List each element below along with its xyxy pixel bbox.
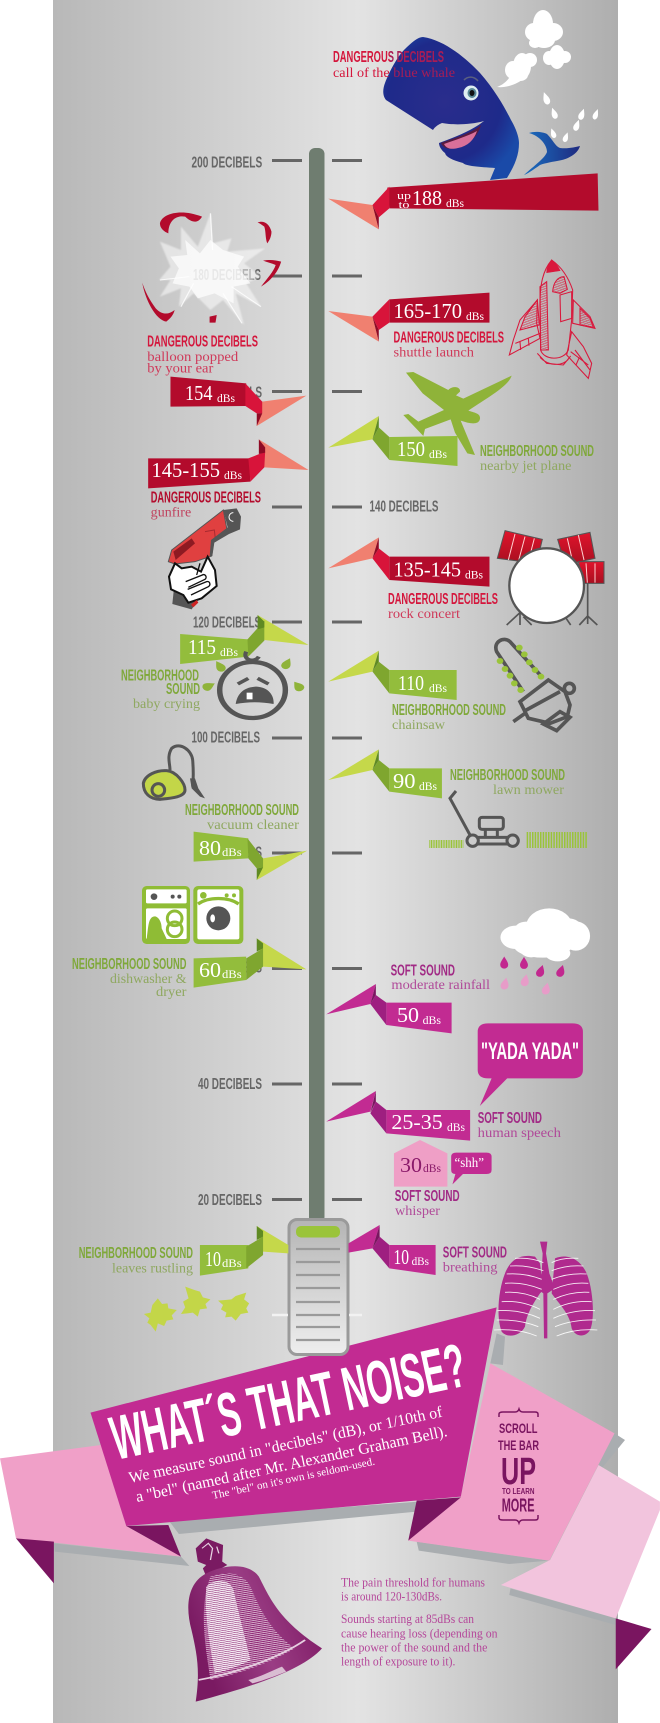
tag: 25-35 dBs human speech: SOFT SOUND: [478, 1110, 542, 1127]
icon: rocket: [509, 260, 595, 378]
tag: 90 dBs lawn mower: 90: [393, 769, 416, 793]
lightest ribbon shadow: [509, 1588, 616, 1625]
toms: [497, 531, 542, 563]
tag: 165-170 dBs shuttle: DANGEROUS DECIBELS: [394, 330, 504, 347]
tag: 154 dBs: [170, 377, 306, 426]
tag: 110 dBs chainsaw: dBs: [429, 683, 448, 695]
tag: 50 dBs moderate rainfall: moderate rainfall: [391, 977, 490, 992]
banner text: We measure sound in "decibels" (dB), or 1/10th of: [127, 1404, 444, 1487]
left ribbon tail: [16, 1538, 54, 1583]
tag: 10 dBs leaves rustling: dBs: [222, 1258, 242, 1270]
tag: 145-155 dBs gunfire: [148, 439, 309, 520]
decibel scale ticks and labels: 40 DECIBELS: [198, 1076, 262, 1093]
icon: lungs: [494, 1242, 597, 1338]
tag: 154 dBs: dBs: [217, 393, 236, 405]
tag: 110 dBs chainsaw: [328, 651, 506, 732]
whale label: DANGEROUS DECIBELS: [333, 49, 444, 66]
speech bubble: yada yada: [478, 1023, 583, 1106]
tag: 60 dBs dishwasher and dryer: dBs: [222, 969, 242, 981]
left ribbon: [0, 1445, 181, 1557]
scroll the bar up callout: SCROLL: [499, 1420, 538, 1436]
tag: up to 188 dBs: [328, 173, 598, 229]
tag: 165-170 dBs shuttle: dBs: [466, 311, 485, 323]
banner text: a "bel" (named after Mr. Alexander Graham Bell).: [134, 1423, 449, 1506]
tag: 145-155 dBs gunfire: DANGEROUS DECIBELS: [151, 490, 261, 507]
tag: 165-170 dBs shuttle: shuttle launch: [394, 345, 474, 360]
hearing facts: length of exposure to it).: [341, 1655, 455, 1669]
tag: 150 dBs jet plane: 150: [397, 437, 425, 461]
banner text: The "bel" on it's own is seldom-used.: [211, 1456, 376, 1502]
tag: 50 dBs moderate rainfall: [326, 963, 490, 1033]
tag: up to 188 dBs: 188: [412, 186, 442, 210]
tag: 10 dBs breathing: dBs: [412, 1256, 429, 1268]
tag: 135-145 dBs rock concert: 135-145: [394, 558, 461, 582]
tag: 120 area, 115 dBs baby: [121, 615, 309, 711]
tag: 30 dBs whisper: SOFT SOUND: [395, 1188, 460, 1205]
tag: 150 dBs jet plane: nearby jet plane: [480, 458, 572, 473]
slider rod: [309, 148, 324, 1223]
tag: 80 dBs: dBs: [222, 847, 242, 859]
vacuum cleaner label: [185, 802, 300, 832]
icon: bell: [188, 1538, 322, 1702]
speech bubble: shh: [451, 1153, 492, 1184]
whale spout clouds: [497, 10, 571, 87]
bell body: [188, 1566, 322, 1702]
grass: [429, 832, 463, 856]
icon: leaves: [144, 1287, 249, 1332]
tag: 90 dBs lawn mower: lawn mower: [493, 782, 565, 797]
decibel scale ticks and labels: 80 DECIBELS: [198, 845, 262, 862]
tag: 25-35 dBs human speech: [326, 1091, 561, 1141]
tag: 135-145 dBs rock concert: dBs: [465, 570, 484, 582]
tag: up to 188 dBs: dBs: [446, 198, 465, 210]
icon: chainsaw: [496, 639, 574, 731]
slider knob: [272, 1220, 362, 1354]
icon: crying baby: [201, 652, 306, 718]
scroll the bar up callout: [498, 1409, 539, 1523]
hearing facts: The pain threshold for humans: [341, 1576, 485, 1590]
icon: gun: [168, 508, 241, 609]
balloon pop: by your ear: [147, 361, 214, 376]
icon: rain cloud: [500, 908, 590, 995]
tag: 135-145 dBs rock concert: rock concert: [388, 606, 460, 621]
tag: 165-170 dBs shuttle: [328, 293, 504, 360]
icon: lawn mower: [429, 791, 588, 846]
tag: 145-155 dBs gunfire: 145-155: [152, 458, 220, 482]
main banner: [90, 1307, 497, 1526]
right tail: [616, 1618, 652, 1669]
vacuum cleaner label: vacuum cleaner: [207, 817, 300, 832]
water drops: [541, 91, 600, 143]
tag: 165-170 dBs shuttle: 165-170: [394, 299, 462, 323]
bell rim: [199, 1640, 305, 1680]
tag: 25-35 dBs human speech: 25-35: [391, 1110, 443, 1134]
bass drum: [509, 548, 584, 623]
speech bubble: yada yada: "YADA YADA": [481, 1038, 579, 1065]
tag: 50 dBs moderate rainfall: 50: [397, 1003, 419, 1027]
hearing facts: is around 120-130dBs.: [341, 1590, 442, 1604]
scroll the bar up callout: TO LEARN: [502, 1487, 535, 1496]
tag: 120 area, 115 dBs baby: 115: [188, 635, 216, 659]
icon: drum kit: [497, 531, 604, 625]
tag: 25-35 dBs human speech: dBs: [447, 1122, 466, 1134]
left fold: [126, 1525, 181, 1557]
tag: 60 dBs dishwasher and dryer: dishwasher &: [110, 971, 187, 986]
tag: 90 dBs lawn mower: NEIGHBORHOOD SOUND: [450, 767, 565, 784]
tag: 120 area, 115 dBs baby: NEIGHBORHOOD: [121, 668, 199, 685]
decibel scale ticks and labels: 120 DECIBELS: [193, 615, 261, 632]
tag: 10 dBs breathing: [348, 1225, 507, 1275]
tag: 10 dBs breathing: 10: [394, 1245, 409, 1269]
hearing facts: cause hearing loss (depending on: [341, 1627, 498, 1641]
scroll the bar up callout: MORE: [502, 1496, 534, 1516]
tag: 120 area, 115 dBs baby: baby crying: [133, 696, 200, 711]
vacuum cleaner label: NEIGHBORHOOD SOUND: [185, 802, 299, 819]
decibel scale ticks and labels: 180 DECIBELS: [193, 267, 261, 284]
tag: 110 dBs chainsaw: NEIGHBORHOOD SOUND: [392, 702, 506, 719]
icon: jet plane: [403, 372, 512, 455]
hearing facts: [341, 1576, 498, 1669]
tag: 60 dBs dishwasher and dryer: [72, 938, 306, 999]
tag: 10 dBs leaves rustling: NEIGHBORHOOD SOUND: [79, 1245, 193, 1262]
tag: 150 dBs jet plane: dBs: [429, 449, 448, 461]
tag: 10 dBs breathing: breathing: [443, 1260, 498, 1275]
tag: 154 dBs: 154: [185, 381, 213, 405]
tag: 10 dBs breathing: SOFT SOUND: [443, 1245, 507, 1262]
decibel scale ticks and labels: [192, 155, 438, 1209]
whale tail: [524, 132, 580, 175]
tag: 10 dBs leaves rustling: [79, 1226, 288, 1276]
tag: 145-155 dBs gunfire: dBs: [224, 470, 243, 482]
icon: vacuum cleaner: [143, 746, 205, 799]
decibel scale ticks and labels: 160 DECIBELS: [192, 385, 262, 402]
balloon pop: balloon popped: [147, 349, 239, 364]
tag: 90 dBs lawn mower: dBs: [419, 781, 438, 793]
speech bubble: shh: “shh”: [454, 1155, 484, 1170]
lightest ribbon: [501, 1465, 660, 1618]
balloon fragments: [142, 212, 281, 323]
tag: 150 dBs jet plane: [328, 416, 594, 473]
tag: 80 dBs: [194, 832, 307, 880]
balloon pop: DANGEROUS DECIBELS: [147, 334, 258, 351]
tag: up to 188 dBs: to: [398, 200, 410, 211]
tag: 10 dBs leaves rustling: leaves rustling: [112, 1260, 193, 1276]
left ribbon shadow: [54, 1543, 189, 1566]
decibel scale ticks and labels: 200 DECIBELS: [192, 155, 262, 172]
hearing facts: Sounds starting at 85dBs can: [341, 1612, 475, 1626]
decibel scale ticks and labels: 20 DECIBELS: [198, 1192, 262, 1209]
decibel scale ticks and labels: 140 DECIBELS: [370, 499, 438, 516]
scroll the bar up callout: THE BAR: [498, 1437, 539, 1453]
tag: 30 dBs whisper: [394, 1140, 460, 1218]
whale: [383, 10, 600, 180]
tag: 80 dBs: 80: [199, 836, 221, 860]
icon: dishwasher and dryer: [142, 886, 243, 944]
tag: 135-145 dBs rock concert: [328, 537, 498, 621]
tag: 30 dBs whisper: whisper: [395, 1203, 441, 1218]
whale eye: [464, 77, 478, 100]
tag: 120 area, 115 dBs baby: dBs: [220, 647, 239, 659]
tag: 30 dBs whisper: 30: [400, 1153, 422, 1177]
tag: 90 dBs lawn mower: [328, 749, 565, 798]
decibel scale ticks and labels: 60 DECIBELS: [198, 960, 262, 977]
right ribbon fold: [408, 1497, 461, 1541]
whale label: call of the blue whale: [333, 65, 455, 80]
ribbon banner: [0, 1307, 660, 1669]
tag: 60 dBs dishwasher and dryer: 60: [199, 958, 221, 982]
decibel scale ticks and labels: 100 DECIBELS: [192, 730, 260, 747]
tag: 135-145 dBs rock concert: DANGEROUS DECIBELS: [388, 591, 498, 608]
tag: 110 dBs chainsaw: chainsaw: [392, 717, 445, 732]
banner shadow: [168, 1498, 463, 1534]
tag: 60 dBs dishwasher and dryer: dryer: [156, 984, 187, 999]
tag: 30 dBs whisper: dBs: [423, 1163, 442, 1175]
right ribbon: [408, 1363, 614, 1561]
bell highlight: [206, 1581, 250, 1673]
whale mouth: [441, 125, 481, 149]
right ribbon shadows: [490, 1333, 505, 1365]
white splash: [159, 213, 265, 325]
tag: 25-35 dBs human speech: human speech: [478, 1125, 561, 1140]
scroll the bar up callout: UP: [501, 1451, 536, 1493]
tag: up to 188 dBs: up: [397, 191, 411, 202]
tag: 120 area, 115 dBs baby: SOUND: [166, 681, 200, 698]
hearing facts: the power of the sound and the: [341, 1641, 488, 1655]
tag: 10 dBs leaves rustling: 10: [205, 1247, 221, 1271]
bell crown: [196, 1538, 227, 1577]
tag: 50 dBs moderate rainfall: SOFT SOUND: [391, 963, 455, 980]
bell shading: [204, 1573, 295, 1680]
tag: 60 dBs dishwasher and dryer: NEIGHBORHOOD SOUND: [72, 956, 186, 973]
tag: 145-155 dBs gunfire: gunfire: [151, 505, 191, 520]
tag: 110 dBs chainsaw: 110: [398, 671, 424, 695]
balloon pop: [142, 212, 281, 376]
tag: 50 dBs moderate rainfall: dBs: [423, 1015, 442, 1027]
whale body: [383, 37, 519, 180]
whale label: [333, 49, 455, 80]
